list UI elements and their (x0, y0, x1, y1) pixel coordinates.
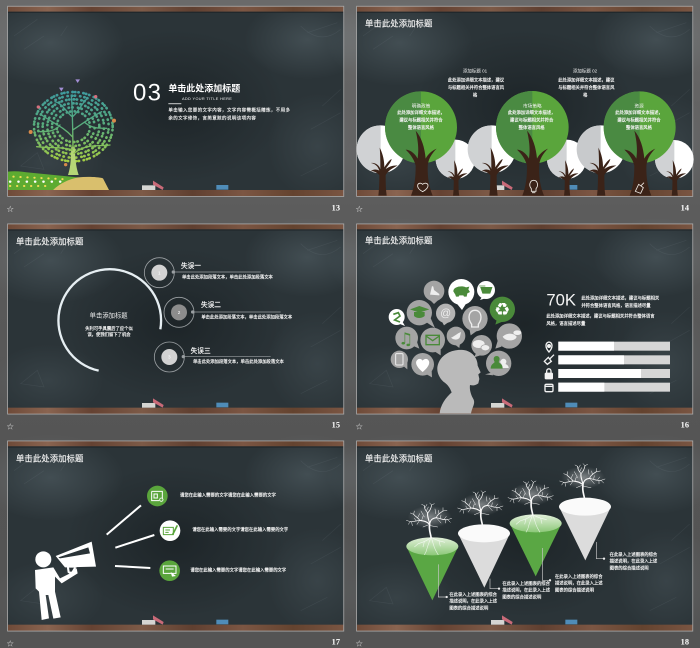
footer star icon: ☆ (355, 205, 363, 215)
caption 4 (610, 551, 658, 571)
speech bubble icons: @ (440, 308, 451, 320)
caption 3: 描述说明，在此录入上述 (555, 580, 603, 587)
caption 1: 在此录入上述图表的综合 (449, 591, 498, 598)
chalkboard (326, 217, 700, 417)
caption 4: 图表的综合描述说明 (610, 564, 649, 571)
sound lines (107, 505, 154, 568)
caption 1: 描述说明，在此录入上述 (449, 598, 498, 605)
cone 3 green with tree (508, 480, 562, 576)
callout text 02 (558, 67, 615, 99)
callout text 01: 添加标题 01 (463, 67, 488, 74)
small pale trees (357, 125, 694, 196)
panel: slide 16 head of ideas (326, 217, 700, 432)
callout text 01: 与标题相关并符合整体语言风 (448, 84, 505, 91)
callout text 01 (448, 67, 505, 99)
big green trees (385, 91, 676, 196)
circle text 3: 整体语言风格 (626, 124, 653, 131)
caption 2 (502, 580, 551, 600)
leader dots (445, 557, 605, 598)
ring centre text: 失利可手具震后了应个似 (85, 325, 133, 332)
tree icons: heart, bulb, broom (418, 180, 644, 193)
slide title: 单击此处添加标题 (365, 19, 433, 29)
caption 1: 图表的综合描述说明 (449, 604, 489, 611)
speech bubble icons: ♻ (494, 300, 510, 321)
slide title: 单击此处添加标题 (16, 453, 84, 463)
panel: slide 17 megaphone (0, 434, 371, 648)
ring centre text: 单击添加标题 (90, 311, 128, 320)
item 2: 失误二 (201, 300, 221, 309)
footer star icon: ☆ (6, 422, 14, 432)
item 2: 2 (178, 310, 181, 315)
page number: 15 (332, 421, 340, 430)
circle text 3 (615, 103, 663, 131)
circle text 3: 建议与标题相关并符合 (617, 116, 661, 123)
circle text 1: 此处添加详细文本描述， (397, 109, 445, 116)
circle text 2 (508, 103, 555, 131)
footer star icon: ☆ (355, 422, 363, 432)
circle text 2: 此处添加详细文本描述， (508, 109, 555, 116)
caption 4: 描述说明，在此录入上述 (610, 558, 658, 565)
item 2 icon and text: 请您在此输入需要的文字请您在此输入需要的文字 (192, 526, 289, 533)
caption 2: 图表的综合描述说明 (502, 593, 542, 600)
panel: slide 18 cones (326, 434, 700, 648)
slide title: 单击此处添加标题 (365, 236, 433, 246)
slide title: 单击此处添加标题 (16, 236, 84, 246)
description text: 此处添加详细文本描述，建议与标题相关 (581, 295, 660, 302)
cone 2 grey with tree (458, 491, 510, 588)
caption 3: 在此录入上述图表的综合 (555, 573, 603, 580)
description text (546, 295, 660, 327)
item 3: 失误三 (191, 346, 211, 355)
item 1 icon and text (147, 486, 277, 506)
footer star icon: ☆ (6, 205, 14, 215)
section title: 单击此处添加标题 (168, 82, 240, 93)
speech bubble icons: ♫ (399, 330, 413, 349)
item 3 icon and text: 请您在此输入需要的文字请您在此输入需要的文字 (190, 567, 287, 574)
description text: 此处添加详细文本描述，建议与标题相关并符合整体语言 (546, 312, 655, 319)
callout text 02: 格 (583, 92, 588, 99)
item 3 (154, 342, 285, 372)
person with megaphone (35, 542, 96, 620)
item 3: 3 (168, 355, 171, 360)
leader lines (438, 542, 604, 597)
caption 2: 在此录入上述图表的综合 (502, 580, 551, 587)
ring centre text (85, 311, 133, 338)
section number: 03 (133, 80, 162, 107)
circle text 1 (397, 103, 445, 131)
page number: 17 (332, 638, 340, 647)
caption 2: 描述说明，在此录入上述 (502, 587, 551, 594)
item 3: 单击此处添加段落文本，单击此处添加段落文本 (193, 358, 285, 365)
panel: slide 14 trees (326, 0, 700, 215)
item 3 icon and text (159, 560, 287, 581)
slide title: 单击此处添加标题 (365, 453, 433, 463)
circle text 1: 建议与标题相关并符合 (399, 116, 443, 123)
description text: 单击输入您要的文字内容，文字内容需概括精炼，不用多 (168, 108, 290, 113)
circle text 3: 资源 (634, 103, 644, 110)
item 1 (144, 258, 274, 288)
speech bubble icons (389, 279, 522, 377)
cone 1 green with tree (406, 503, 458, 600)
open ring (58, 269, 161, 371)
item 2 (164, 297, 293, 327)
item 2: 单击此处添加段落文本，单击此处添加段落文本 (201, 313, 293, 320)
chalkboard (0, 0, 371, 199)
caption 1 (449, 591, 498, 611)
circle text 1: 整体语言风格 (408, 124, 435, 131)
callout text 01: 此处添加详细文本描述，建议 (448, 76, 505, 83)
bar icons (544, 342, 554, 392)
caption 3 (555, 573, 603, 593)
page number: 16 (681, 421, 689, 430)
circle text 2: 建议与标题相关并符合 (510, 116, 554, 123)
progress bars (558, 342, 670, 392)
chalkboard (326, 434, 700, 634)
callout text 02: 与标题相关并符合整体语言风 (558, 84, 615, 91)
cone 4 grey with tree (559, 464, 611, 560)
subtitle: ADD YOUR TITLE HERE (182, 97, 232, 101)
page number: 14 (681, 203, 690, 212)
page number: 13 (332, 203, 340, 212)
illustration: coloured tree on a hill (8, 79, 116, 190)
page number: 18 (681, 638, 689, 647)
item 2 icon and text (160, 520, 289, 541)
panel: slide 13 section cover (0, 0, 371, 215)
chalkboard (0, 434, 371, 634)
title underline (168, 102, 181, 105)
circle text 3: 此处添加详细文本描述， (615, 109, 663, 116)
callout text 02: 添加标题 02 (573, 67, 598, 74)
circle text 2: 整体语言风格 (519, 124, 545, 131)
callout text 02: 此处添加详细文本描述，建议 (558, 76, 615, 83)
circle text 2: 市场策略 (523, 103, 542, 110)
chalkboard (326, 0, 700, 199)
item 1: 单击此处添加段落文本，单击此处添加段落文本 (182, 273, 274, 280)
item 1 icon and text: 请您在此输入需要的文字请您在此输入需要的文字 (180, 491, 277, 498)
panel: slide 15 three mistakes (0, 217, 371, 432)
girl silhouette (437, 350, 481, 413)
description text: 余的文字修饰，言简意赅的说明该项内容 (168, 114, 256, 121)
caption 3: 图表的综合描述说明 (555, 586, 595, 593)
item 1: 失误一 (181, 261, 201, 270)
big number: 70K (546, 290, 576, 309)
item 1: 1 (158, 270, 161, 275)
circle text 1: 明确政策 (412, 103, 431, 110)
ring centre text: 误，使我们留下了机会 (87, 331, 131, 338)
chalkboard (0, 217, 371, 417)
callout text 01: 格 (473, 92, 478, 99)
description text: 并符合整体语言风格，语言描述尽量 (581, 302, 651, 309)
caption 4: 在此录入上述图表的综合 (610, 551, 658, 558)
description text: 风格，语言描述尽量 (546, 320, 586, 327)
